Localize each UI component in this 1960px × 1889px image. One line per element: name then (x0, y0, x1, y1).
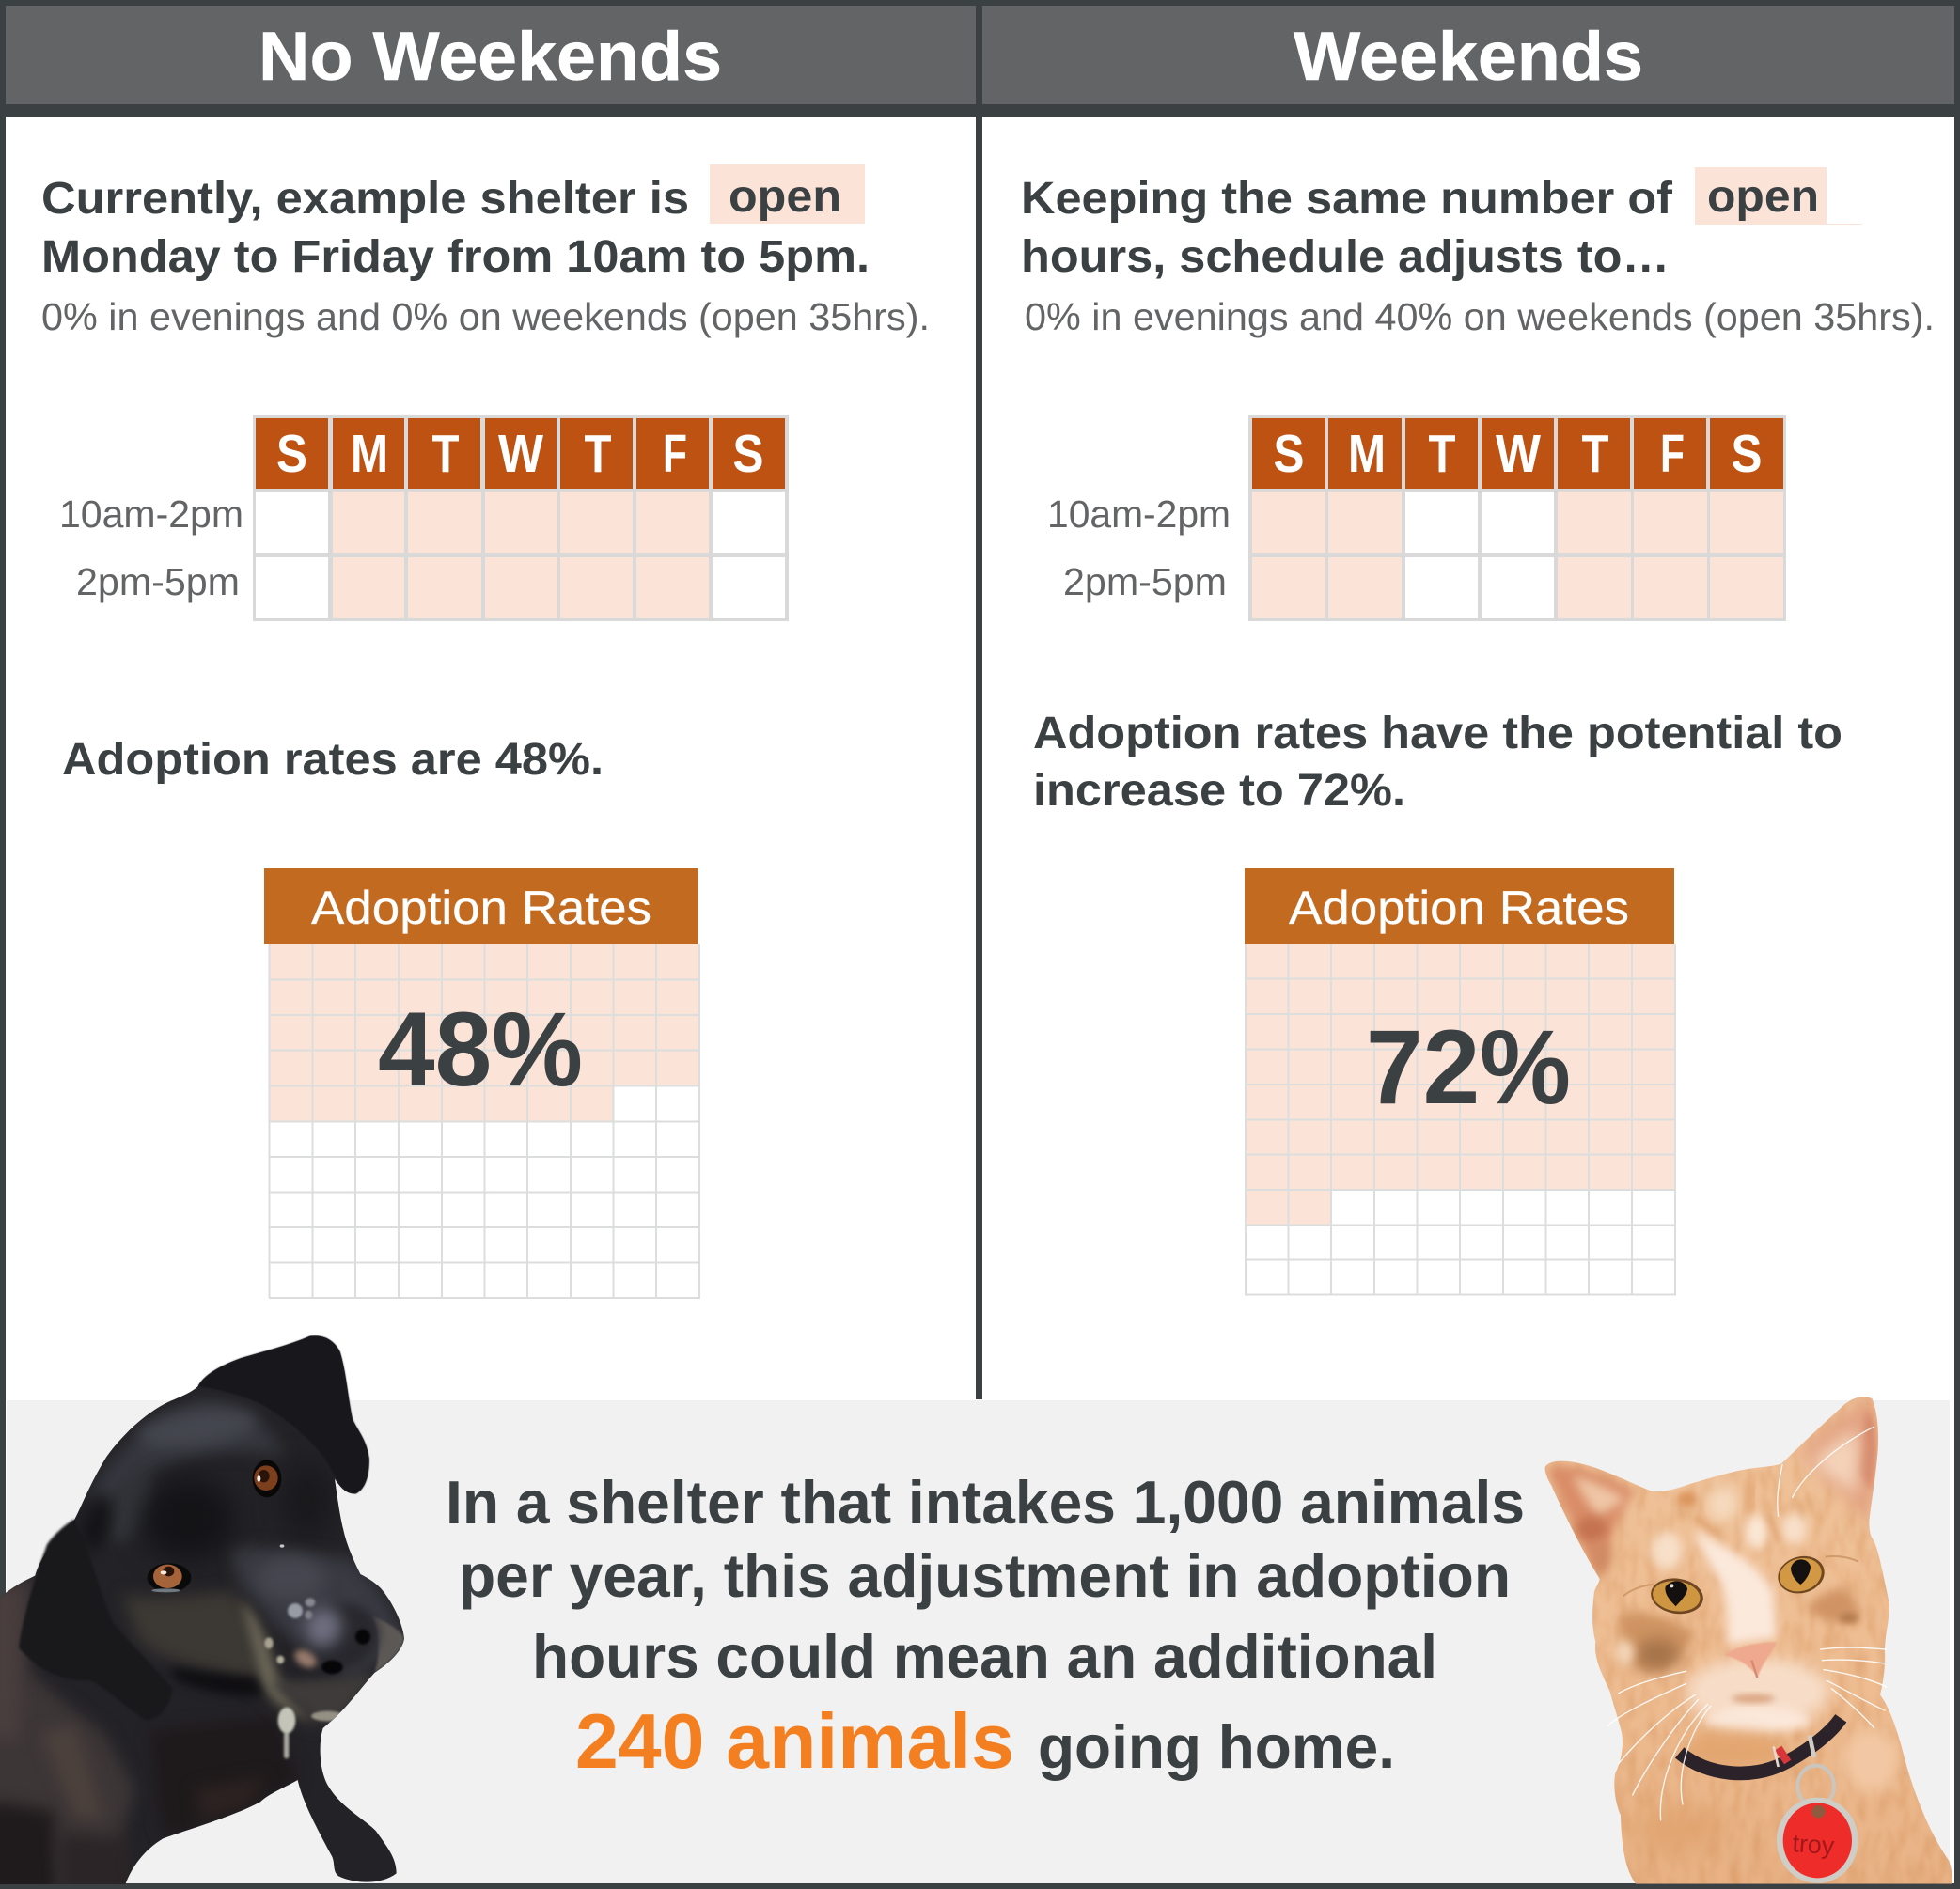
panel: Weekends (982, 6, 1954, 1400)
text: current schedule: Currently, example shelter is (41, 174, 689, 224)
schedule table: weekends open: T (1429, 424, 1456, 484)
cat whiskers (1607, 1427, 1887, 1820)
cat tag (1777, 1766, 1858, 1883)
dog eye: upper (253, 1460, 281, 1497)
schedule table: weekdays open: F (663, 424, 687, 484)
schedule table: weekdays open: 10am-2pm (59, 492, 243, 536)
schedule table: weekends open: W (1496, 424, 1541, 484)
text: summary: 240 animals (575, 1697, 1014, 1785)
text: summary: In a shelter that intakes 1,000 animals (446, 1468, 1525, 1537)
heading bar: Weekends: Weekends (1294, 19, 1643, 95)
schedule table: weekends open: 10am-2pm (1047, 492, 1231, 536)
text: adoption rates 72: Adoption rates have the potential to (1033, 709, 1842, 758)
text: summary: hours could mean an additional (532, 1622, 1437, 1691)
panel background (982, 117, 1954, 1400)
heading bar: Weekends (982, 6, 1954, 104)
waffle chart: 72 percent: 72% (1366, 1008, 1571, 1126)
cat tag: troy (1792, 1829, 1836, 1860)
heading bar: No Weekends: No Weekends (259, 19, 722, 95)
text: adoption rates 48: Adoption rates are 48%. (62, 735, 604, 785)
cat collar (1680, 1718, 1841, 1773)
schedule table: weekdays open: T (432, 424, 460, 484)
text: adjusted schedule: hours, schedule adjusts to… (1021, 232, 1670, 282)
text: summary: going home. (1038, 1712, 1395, 1781)
heading bar: No Weekends (6, 6, 976, 104)
schedule table: weekends open: S (1732, 424, 1762, 484)
waffle chart: 72 percent: Adoption Rates (1289, 882, 1629, 934)
schedule table: weekends open: T (1581, 424, 1609, 484)
schedule table: weekends open (1047, 415, 1786, 621)
photo: black dog (0, 1325, 414, 1889)
panel: bottom summary (6, 1399, 1954, 1883)
schedule table: weekends open: M (1348, 424, 1386, 484)
text: current schedule: Monday to Friday from 10am to 5pm. (41, 232, 870, 282)
text: current schedule: 0% in evenings and 0% on weekends (open 35hrs). (41, 295, 930, 338)
schedule table: weekends open: F (1660, 424, 1685, 484)
waffle chart: 48 percent: Adoption Rates (311, 882, 651, 934)
schedule table: weekends open: 2pm-5pm (1063, 560, 1227, 603)
text: adjusted schedule (1021, 167, 1935, 338)
panel background (6, 117, 976, 1400)
schedule table: weekdays open: T (585, 424, 612, 484)
text: current schedule: open (729, 172, 841, 222)
photo: orange cat (1532, 1391, 1955, 1886)
waffle chart: 48 percent: 48% (378, 991, 583, 1108)
text: adoption rates 72 (1033, 709, 1842, 816)
waffle chart: 48 percent (264, 868, 700, 1298)
text: current schedule (41, 164, 930, 338)
dog eye: lower (148, 1563, 191, 1592)
dog ear: left (19, 1520, 172, 1721)
schedule table: weekdays open: 2pm-5pm (76, 560, 240, 603)
schedule table: weekdays open: W (498, 424, 543, 484)
text: adjusted schedule: 0% in evenings and 40% on weekends (open 35hrs). (1025, 295, 1935, 338)
text: adjusted schedule: Keeping the same number of (1021, 174, 1673, 224)
schedule table: weekdays open: S (276, 424, 307, 484)
text: summary: per year, this adjustment in adoption (459, 1541, 1511, 1610)
schedule table: weekdays open: M (351, 424, 388, 484)
dog tag (278, 1708, 295, 1758)
schedule table: weekdays open (59, 415, 789, 621)
text: adoption rates 72: increase to 72%. (1033, 766, 1405, 816)
text: summary (446, 1468, 1525, 1785)
waffle chart: 72 percent (1245, 868, 1676, 1295)
text: adjusted schedule: open (1707, 172, 1819, 222)
schedule table: weekends open: S (1273, 424, 1305, 484)
schedule table: weekdays open: S (733, 424, 763, 484)
panel: No Weekends (6, 6, 976, 1400)
dog ear: right (198, 1335, 369, 1493)
